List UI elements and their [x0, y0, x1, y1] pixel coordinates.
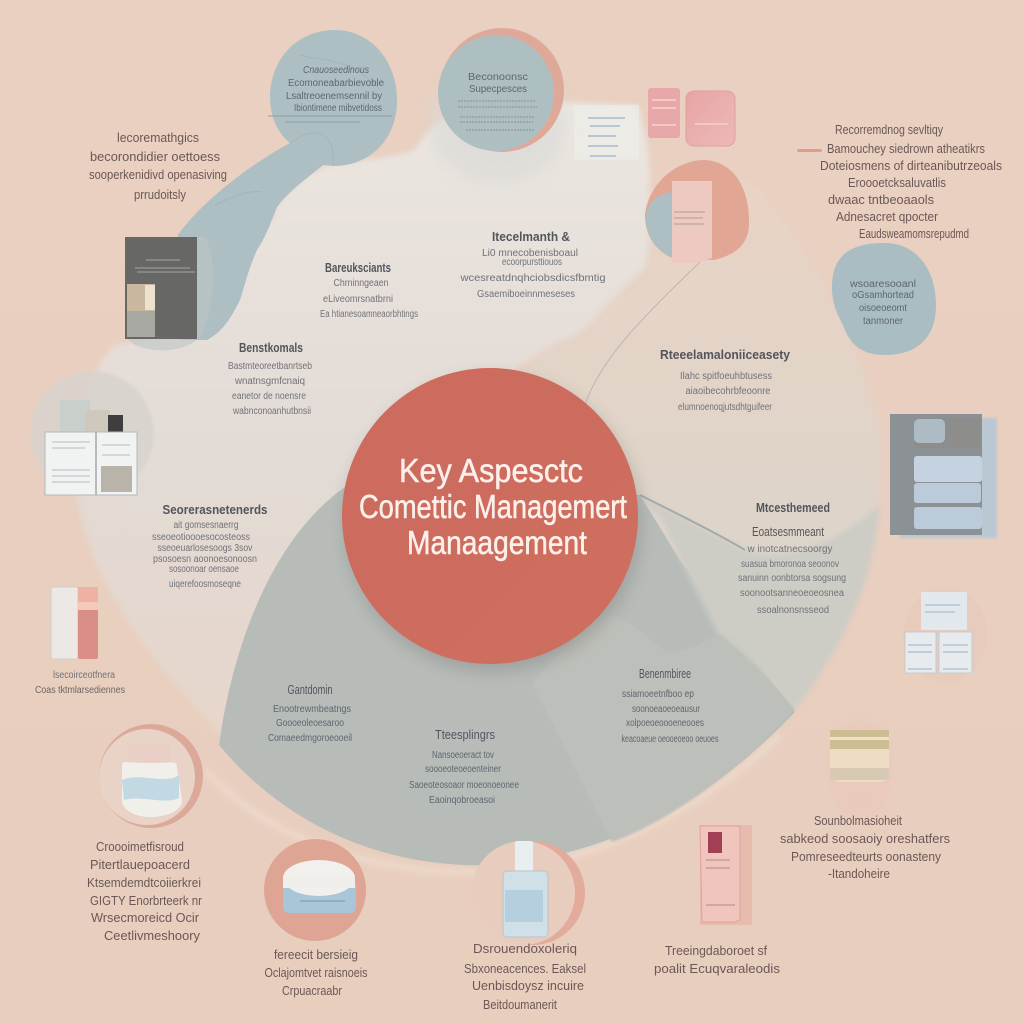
glow under lower edge	[205, 735, 780, 872]
text block: Gantdomin: Comaeedmgoroeooeil	[268, 733, 352, 744]
text block: recommend: Gsaemiboeinnmeseses	[477, 289, 575, 300]
text block: recommend: ecoorpursttiouos	[502, 257, 562, 268]
panel: right rounded blob: oGsamhortead	[852, 290, 914, 301]
panel: beige right region	[400, 177, 881, 866]
text block: upper right: Adnesacret qpocter	[836, 209, 939, 224]
panel: grey lower region	[219, 487, 880, 865]
text block: lower left: Ktsemdemdtcoiierkrei	[87, 875, 201, 890]
text block: recommend: Itecelmanth &	[492, 230, 570, 244]
title: Manaagement	[407, 524, 587, 561]
text block: Seorerasnetenerds: Seorerasnetenerds	[162, 503, 268, 517]
text block: lower left	[87, 839, 203, 943]
panel: pale upper-left region	[75, 100, 650, 740]
text block: Benstkomals: wnatnsgmfcnaiq	[234, 376, 305, 387]
blob text: Lsaltreoenemsennil by	[286, 91, 382, 102]
text block: Tteesplingrs: soooeoteoeoenteiner	[425, 764, 502, 775]
text block: Gantdomin: Goooeoleoesaroo	[276, 718, 344, 729]
mid grey band	[532, 615, 795, 842]
central title circle	[342, 368, 638, 664]
text block: Seorerasnetenerds: sseoeuarlosesoogs 3sov	[158, 543, 252, 554]
icon: blue jar in circle	[264, 839, 366, 941]
icon: open book in circle	[30, 371, 154, 495]
text block: left bottle caption: Coas tktmlarsediennes	[35, 685, 125, 696]
text block: Benenmbiree	[622, 667, 718, 745]
text block: recommend: wcesreatdnqhciobsdicsfbmtig	[459, 273, 606, 284]
panel: right rounded blob: oisoeoeomt	[859, 303, 907, 314]
text block: Gantdomin: Gantdomin	[288, 683, 333, 697]
text block: recommend	[459, 230, 606, 300]
text block: bottom centre: Uenbisdoysz incuire	[472, 978, 584, 993]
central circle shadow	[345, 376, 641, 672]
blob text	[286, 65, 384, 114]
text block: Benstkomals	[228, 341, 312, 417]
text block: lower left: Wrsecmoreicd Ocir	[91, 910, 200, 925]
text block: Bareuksciants: eLiveomrsnatbrni	[323, 294, 393, 305]
text block: upper right: Bamouchey siedrown atheatikrs	[827, 141, 985, 156]
text block: Benstkomals: eanetor de noensre	[232, 391, 306, 402]
icon: right book with blue tabs	[890, 414, 997, 538]
text block: lower right	[780, 813, 950, 881]
icon: boxes	[903, 587, 987, 683]
text block: upper right: dwaac tntbeoaaols	[828, 192, 934, 207]
text block: lower left: GIGTY Enorbrteerk nr	[90, 893, 203, 908]
text block: Mtcesthemeed: suasua bmoronoa seoonov	[741, 559, 839, 570]
text block: Tteesplingrs: Nansoeoeract tov	[432, 750, 494, 761]
text block: Mtcesthemeed: ssoalnonsnsseod	[757, 605, 829, 616]
icon: segmented blob with card	[645, 160, 749, 263]
title: Comettic Managemert	[359, 488, 627, 525]
panel: right rounded blob: tanmoner	[863, 316, 904, 327]
text block: Rteeelamaloniiceasety: aiaoibecohrbfeoonre	[686, 386, 771, 397]
panel: blue blob with neck	[178, 30, 397, 340]
text block: Gantdomin: Enootrewmbeatngs	[273, 704, 351, 715]
icon: pink tube card	[700, 825, 752, 925]
text block: upper left: prrudoitsly	[134, 187, 186, 202]
text block: lower right: Sounbolmasioheit	[814, 813, 902, 828]
text block: Benenmbiree: Benenmbiree	[639, 667, 691, 681]
text block: Rteeelamaloniiceasety: elumnoenoqjutsdhtguifeer	[678, 402, 773, 413]
text block: Mtcesthemeed: w inotcatnecsoorgy	[747, 544, 832, 555]
text block: Rteeelamaloniiceasety: Ilahc spitfoeuhbtusess	[680, 371, 772, 382]
text block: bottom centre: Dsrouendoxoleriq	[473, 941, 577, 956]
text block: Mtcesthemeed: Eoatsesmmeant	[752, 525, 824, 539]
text block: Seorerasnetenerds: sseoeotioooesocosteoss	[152, 532, 250, 543]
text block: lower left: Croooimetfisroud	[96, 839, 184, 854]
text block: lower left: Ceetlivmeshoory	[104, 928, 200, 943]
text block: lower right: sabkeod soosaoiy oreshatfers	[780, 831, 950, 846]
dash accent	[797, 149, 822, 152]
veins	[215, 55, 380, 205]
text block: bottom left small: fereecit bersieig	[274, 947, 358, 962]
text block: bottom centre	[464, 941, 586, 1012]
text block: lower right: -Itandoheire	[828, 866, 890, 881]
icon: gold jar	[827, 720, 893, 820]
blob text: Ecomoneabarbievoble	[288, 78, 384, 89]
text block: Benenmbiree: ssiamoeetnfboo ep	[622, 689, 694, 700]
text block: upper left: sooperkenidivd openasiving	[89, 167, 227, 182]
text block: left bottle caption: lsecoirceotfnera	[53, 670, 115, 681]
text block: bottom left small	[264, 947, 368, 998]
text block: Seorerasnetenerds: sosoonoar oensaoe	[169, 564, 239, 575]
panel: top circle: Beconoonsc	[468, 72, 528, 83]
blob text: Cnauoseedinous	[303, 65, 369, 76]
text block: Benenmbiree: keacoaeue oeooeoeoo oeuoes	[622, 734, 718, 745]
text block: upper left: lecoremathgics	[117, 130, 199, 145]
text block: Benstkomals: Benstkomals	[239, 341, 303, 355]
text block: Benstkomals: Bastmteoreetbanrtseb	[228, 361, 312, 372]
text block: Rteeelamaloniiceasety: Rteeelamaloniiceasety	[660, 348, 790, 362]
text block: bottom right: poalit Ecuqvaraleodis	[654, 961, 781, 976]
text block: Mtcesthemeed: Mtcesthemeed	[756, 501, 830, 515]
text block: bottom centre: Sbxoneacences. Eaksel	[464, 961, 586, 976]
icon: lipstick bottles	[51, 587, 98, 659]
text block: Seorerasnetenerds: psosoesn aoonoesonoosn	[153, 554, 257, 565]
card: pale document	[574, 105, 639, 160]
text block: Seorerasnetenerds: ait gomsesnaerrg	[174, 520, 238, 531]
text block: upper right: Doteiosmens of dirteanibutrzeoals	[820, 158, 1002, 173]
panel: top circle	[430, 28, 566, 185]
text block: upper right: Eaudsweamomsrepudmd	[859, 226, 969, 241]
text block: bottom left small: Oclajomtvet raisnoeis	[264, 965, 368, 980]
blob text: Ibiontimene mibvetidoss	[294, 103, 382, 114]
text block: Tteesplingrs	[409, 728, 519, 806]
icon: bottle in circle	[471, 841, 585, 945]
text block: Bareuksciants: Bareuksciants	[325, 261, 391, 275]
text block: Bareuksciants	[320, 261, 418, 320]
text block: Gantdomin	[268, 683, 352, 744]
lighter grey band	[640, 495, 880, 709]
text block: Bareuksciants: Chrninngeaen	[334, 278, 388, 289]
text block: Mtcesthemeed	[738, 501, 846, 616]
panel: top circle: Supecpesces	[469, 84, 527, 95]
text block: upper left: becorondidier oettoess	[90, 149, 220, 164]
icon: dark book	[125, 237, 213, 350]
text block: upper right	[797, 122, 1002, 241]
text block: lower left: Pitertlauepoacerd	[90, 857, 190, 872]
text block: bottom right: Treeingdaboroet sf	[665, 943, 767, 958]
icon: pink product cards	[648, 88, 735, 146]
text block: Rteeelamaloniiceasety	[660, 348, 790, 413]
text block: Seorerasnetenerds: uiqerefoosmoseqne	[169, 579, 241, 590]
panel: right rounded blob	[832, 243, 936, 355]
text block: Tteesplingrs: Eaoinqobroeasoi	[429, 795, 495, 806]
text block: recommend: Li0 mnecobenisboaul	[482, 248, 578, 259]
text block: upper right: Eroooetcksaluvatlis	[848, 175, 946, 190]
text block: Tteesplingrs: Saoeoteosoaor moeonoeonee	[409, 780, 519, 791]
title	[359, 452, 627, 561]
text block: upper left	[89, 130, 227, 202]
text block: Mtcesthemeed: sanuinn oonbtorsa sogsung	[738, 573, 846, 584]
icon: white jar in circle	[99, 724, 203, 828]
text block: left bottle caption	[35, 670, 125, 696]
text block: Benenmbiree: soonoeaoeoeausur	[632, 704, 701, 715]
text block: lower right: Pomreseedteurts oonasteny	[791, 849, 941, 864]
connector line to top-right blob	[585, 262, 700, 405]
text block: Tteesplingrs: Tteesplingrs	[435, 728, 495, 742]
text block: Mtcesthemeed: soonootsanneoeoeosnea	[740, 588, 844, 599]
connector line to right block	[640, 495, 745, 550]
rule line	[268, 116, 392, 122]
text block: upper right: Recorremdnog sevltiqy	[835, 122, 943, 137]
text block: bottom left small: Crpuacraabr	[282, 983, 343, 998]
text block: Benenmbiree: xolpoeoeoooeneooes	[626, 718, 704, 729]
panel: right rounded blob: wsoaresooanl	[849, 279, 916, 290]
text block: bottom right	[654, 943, 781, 976]
text block: bottom centre: Beitdoumanerit	[483, 997, 557, 1012]
text block: Seorerasnetenerds	[152, 503, 268, 590]
text block: Bareuksciants: Ea htianesoamneaorbhtings	[320, 309, 418, 320]
text block: Benstkomals: wabnconoanhutbnsii	[232, 406, 311, 417]
title: Key Aspesctc	[399, 452, 583, 489]
